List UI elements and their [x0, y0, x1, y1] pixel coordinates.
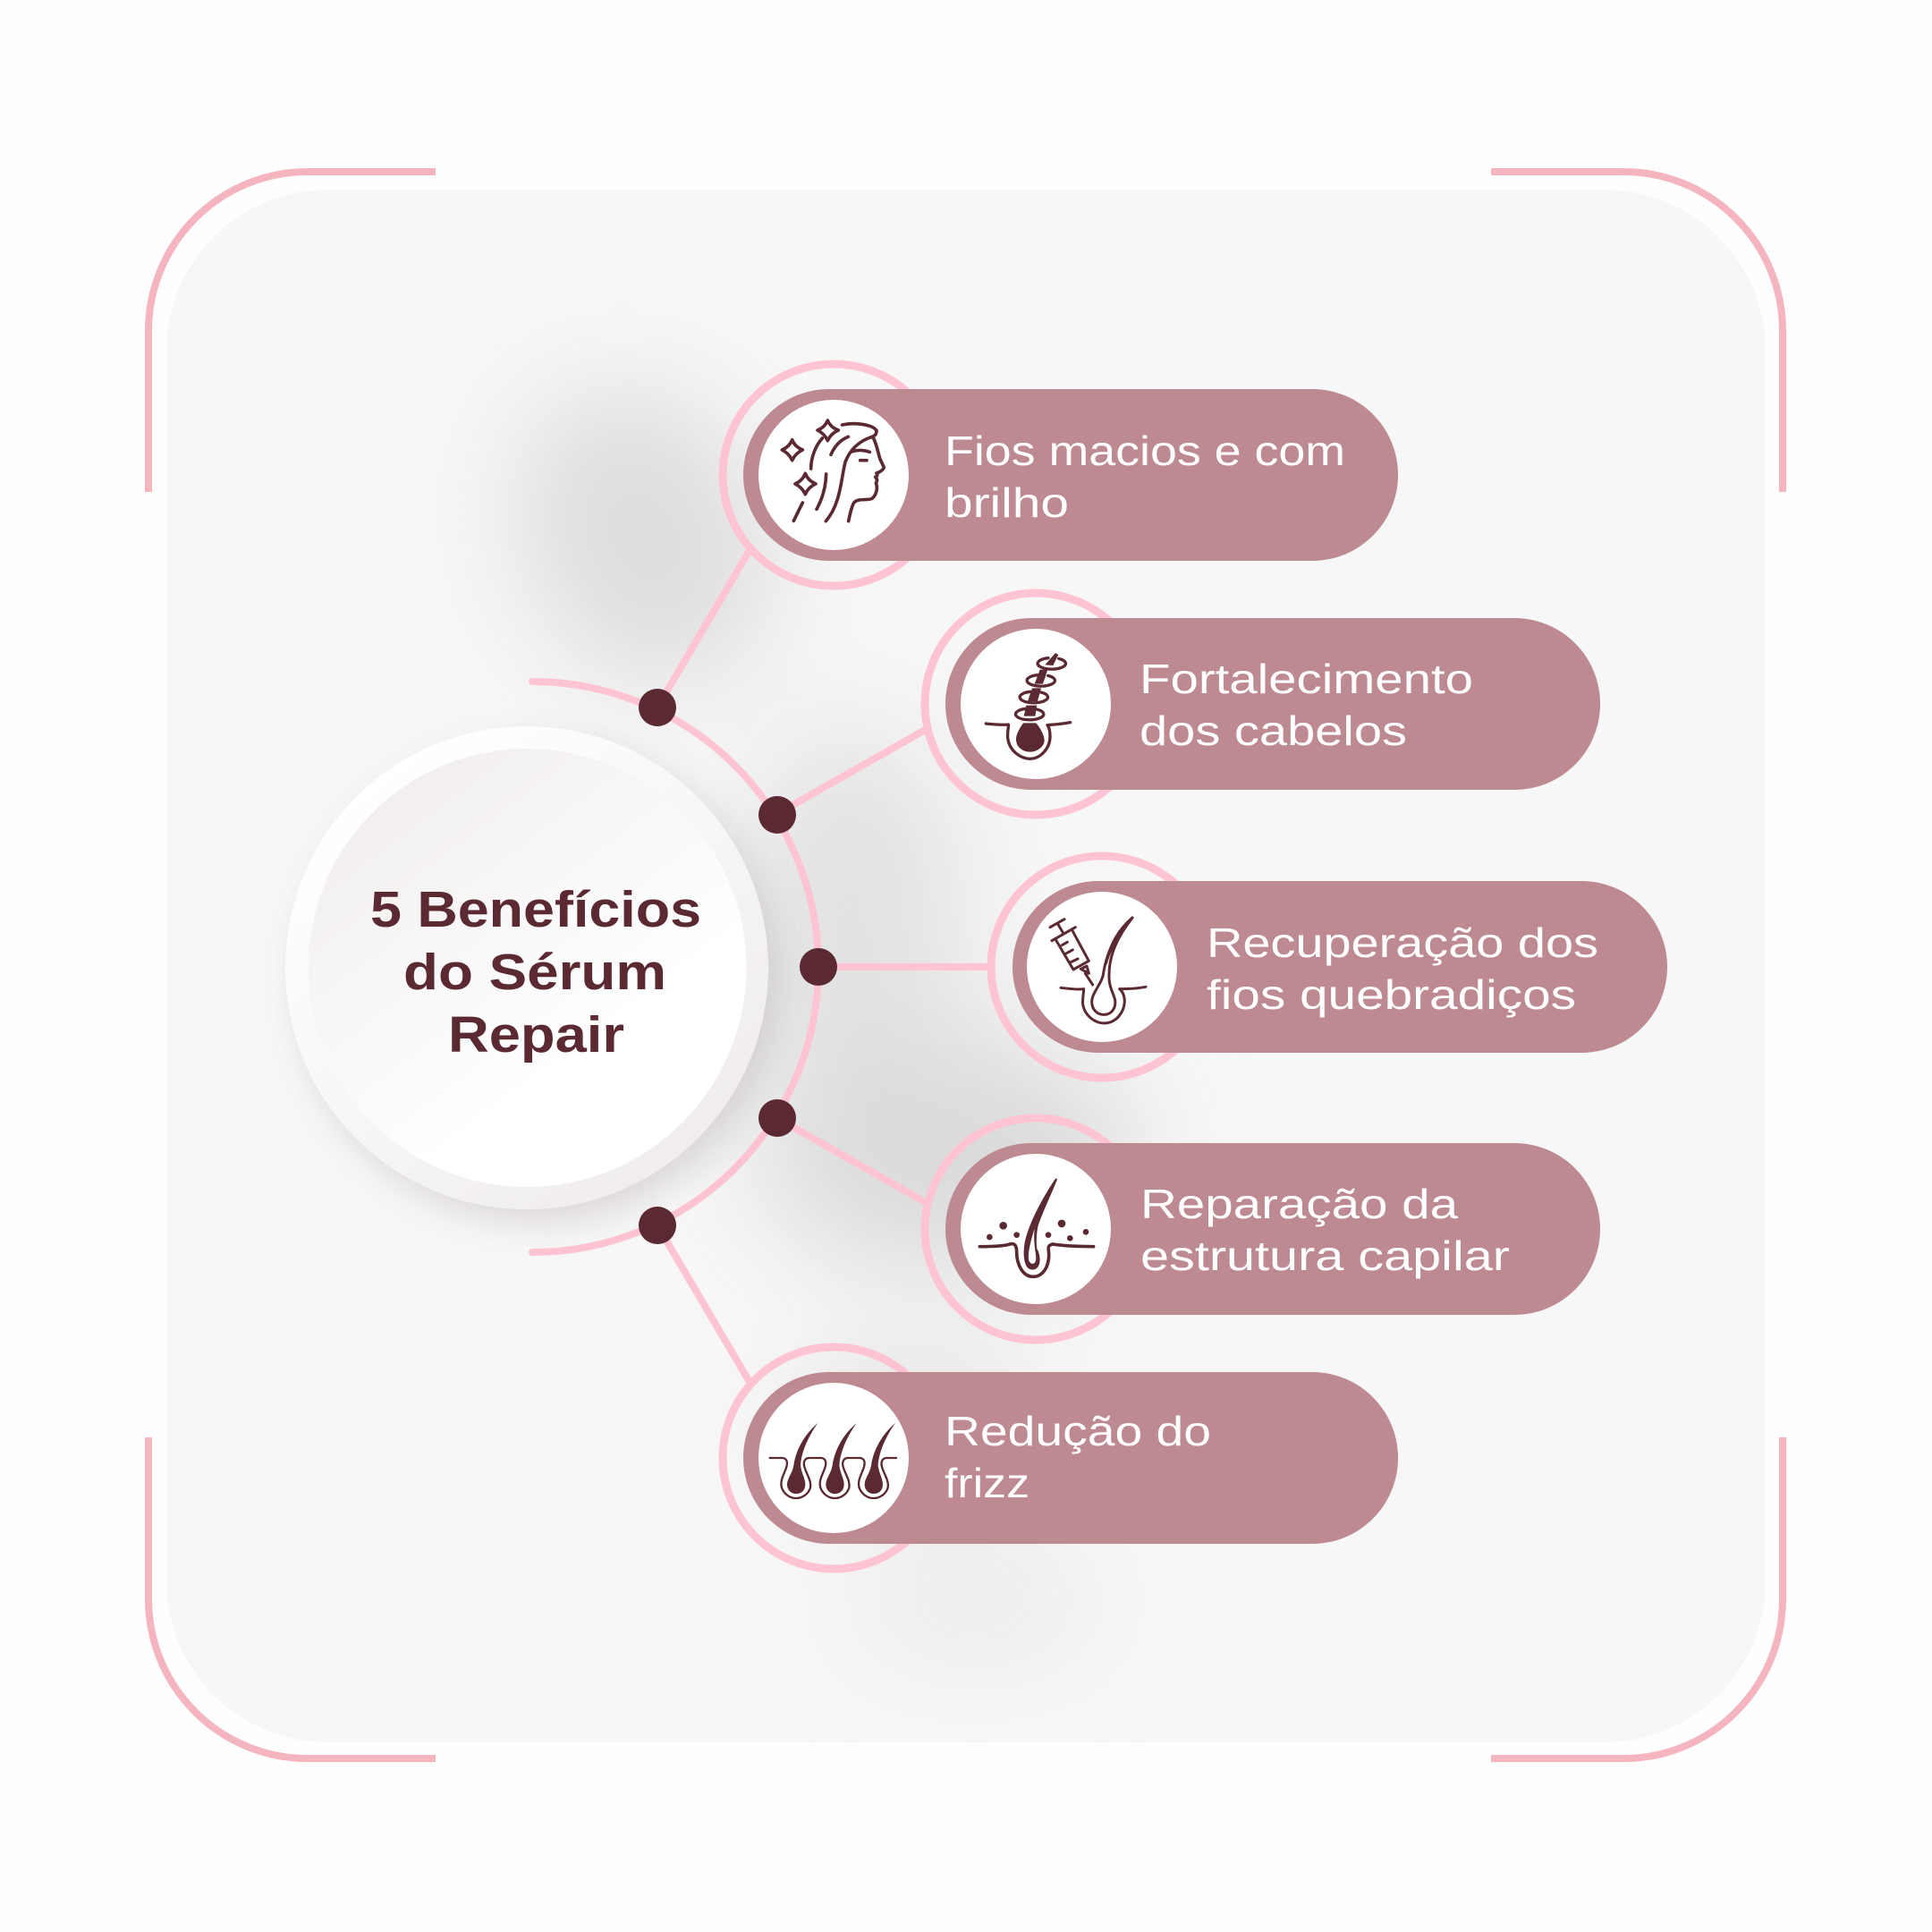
panel: background card: [166, 190, 1766, 1742]
corner bracket: top right: [1491, 172, 1783, 492]
corner bracket: top left: [148, 172, 436, 492]
icon: reinforced hair strand: [986, 653, 1071, 758]
label: Redução do: [945, 1408, 1211, 1454]
central circle: [285, 726, 768, 1209]
label: fios quebradiços: [1207, 971, 1576, 1018]
title: [370, 881, 701, 1063]
label: [1140, 1181, 1510, 1279]
benefit 2: stronger hair: [925, 593, 1600, 815]
title: do Sérum: [403, 944, 666, 1001]
icon: three hair follicles: [770, 1423, 896, 1498]
connector lines: [657, 550, 991, 1382]
label: [945, 428, 1345, 526]
label: [1207, 919, 1598, 1018]
soft cast shadows: [474, 350, 1136, 1646]
label: Reparação da: [1140, 1181, 1459, 1227]
benefit 4: capillary structure repair: [925, 1118, 1600, 1340]
label: estrutura capilar: [1140, 1233, 1510, 1279]
timeline dots: [639, 689, 837, 1244]
icon: syringe and hair follicle: [1050, 918, 1146, 1023]
benefit 5: frizz reduction: [723, 1347, 1398, 1569]
label: [1140, 656, 1473, 754]
icon: hair follicle with particles: [979, 1180, 1094, 1276]
title: Repair: [448, 1006, 624, 1063]
label: Fios macios e com: [945, 428, 1345, 474]
label: dos cabelos: [1140, 708, 1407, 754]
corner bracket: bottom left: [148, 1437, 436, 1758]
label: frizz: [945, 1460, 1030, 1506]
label: Fortalecimento: [1140, 656, 1473, 702]
label: [945, 1408, 1211, 1506]
label: brilho: [945, 479, 1069, 526]
title: 5 Benefícios: [370, 881, 701, 938]
benefit 3: recovery of broken hair: [991, 856, 1667, 1078]
arc around central circle: [532, 682, 818, 1252]
icon: woman profile with sparkles: [782, 420, 884, 521]
benefit 1: soft shiny hair: [723, 364, 1398, 586]
corner bracket: bottom right: [1491, 1437, 1783, 1758]
label: Recuperação dos: [1207, 919, 1598, 966]
